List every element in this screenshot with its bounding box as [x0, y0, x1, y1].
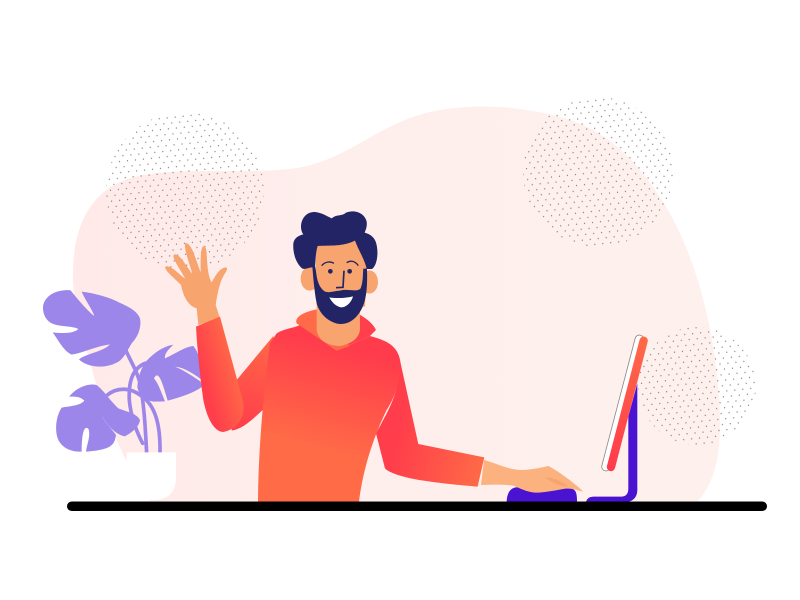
hair [293, 211, 377, 269]
monitor screen: white side [606, 339, 639, 467]
desk [67, 502, 767, 511]
leaf: top left [43, 290, 140, 367]
hoodie [196, 300, 484, 502]
upper arm [232, 336, 277, 431]
head [293, 211, 378, 324]
raised hand and wrist [165, 243, 227, 325]
ears [301, 267, 319, 291]
face [316, 240, 367, 307]
dot pattern: upper left [106, 112, 264, 270]
plant stems [107, 351, 160, 453]
thumb shading [545, 477, 568, 487]
eyes [328, 269, 333, 274]
hood collar [296, 309, 350, 351]
plant pot [30, 452, 176, 500]
monitor stand [586, 383, 637, 502]
monitor screen: red side [611, 341, 644, 467]
raised sleeve [196, 317, 244, 432]
man [165, 211, 484, 502]
nose [336, 271, 344, 288]
eyebrows [322, 261, 358, 266]
leaf: lower left [56, 384, 140, 452]
dot pattern: lower right [638, 327, 756, 445]
computer [481, 339, 644, 502]
mouse [507, 487, 577, 502]
hand on mouse [481, 460, 583, 493]
neck [317, 300, 360, 346]
mouth [329, 296, 353, 307]
hoodie body [258, 325, 401, 502]
hood right side [330, 314, 376, 351]
right arm sleeve [376, 363, 484, 487]
background blob [73, 107, 720, 501]
beard [312, 267, 367, 324]
leaf: right [137, 345, 202, 402]
dot pattern: upper right [523, 97, 673, 247]
plant [30, 290, 202, 500]
